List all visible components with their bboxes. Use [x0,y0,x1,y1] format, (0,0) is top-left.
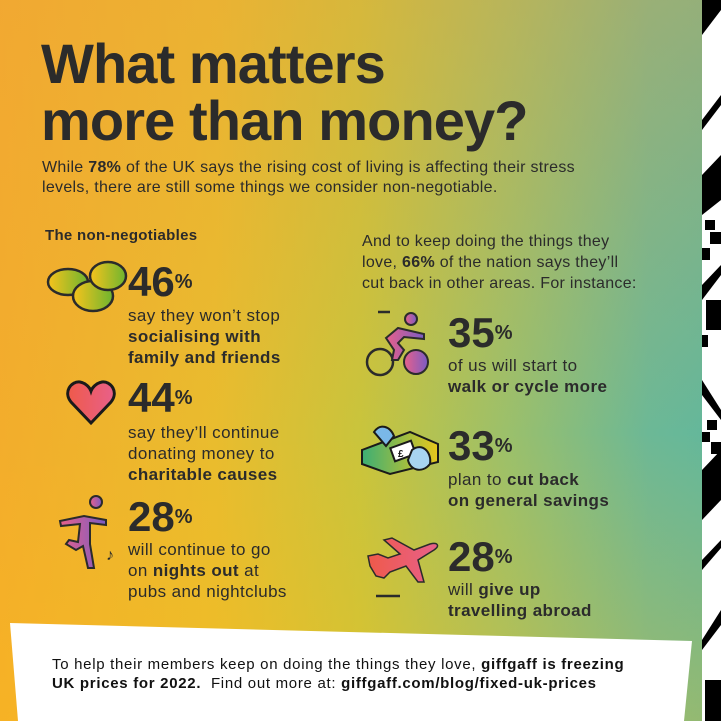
stat 46: family and friends [128,348,281,367]
stat 35: 35% [448,309,513,356]
heading: non-negotiables: The non-negotiables [45,227,197,244]
icon: dancer: ♪ [106,547,114,564]
icon: dancer [58,495,114,569]
subtitle: While 78% of the UK says the rising cost of living is affecting their stress [42,159,575,176]
stat 28 travel [448,533,592,620]
intro right: And to keep doing the things they [362,233,609,250]
stat 46: say they won’t stop [128,306,280,325]
stat 28 nights: on nights out at [128,561,259,580]
stat 44: charitable causes [128,465,278,484]
stat 44: say they’ll continue [128,423,280,442]
stat 28 travel: travelling abroad [448,601,592,620]
stat 33: plan to cut back [448,470,579,489]
icon: money: £ [398,449,404,460]
stat 33: 33% [448,422,513,469]
footer text [52,656,624,692]
icon: plane [367,537,438,598]
icon: speech bubbles [46,260,128,312]
stat 28 nights [128,493,287,601]
icon: heart [66,380,116,425]
stat 46: socialising with [128,327,261,346]
stat 44: 44% [128,374,193,421]
decorative strip [702,0,721,721]
stat 46 [128,258,281,367]
stat 28 nights: 28% [128,493,193,540]
stat 35: walk or cycle more [448,377,607,396]
stat 28 travel: 28% [448,533,513,580]
subtitle: levels, there are still some things we consider non-negotiable. [42,179,498,196]
title: more than money? [41,89,528,152]
stat 33 [448,422,609,510]
stat 44: donating money to [128,444,275,463]
title: What matters [41,32,385,95]
footer text: To help their members keep on doing the things they love, giffgaff is freezing [52,656,624,673]
stat 35: of us will start to [448,356,577,375]
stat 28 nights: will continue to go [128,540,271,559]
stat 28 nights: pubs and nightclubs [128,582,287,601]
intro right [362,233,637,292]
stat 35 [448,309,607,396]
footer panel [10,623,692,721]
subtitle [42,159,575,196]
intro right: love, 66% of the nation says they’ll [362,254,618,271]
stat 28 travel: will give up [448,580,541,599]
intro right: cut back in other areas. For instance: [362,275,637,292]
stat 33: on general savings [448,491,609,510]
stat 44 [128,374,280,484]
icon: cyclist [366,310,429,376]
stat 46: 46% [128,258,193,305]
footer text: UK prices for 2022. Find out more at: giffgaff.com/blog/fixed-uk-prices [52,675,597,692]
icon: money [361,426,439,475]
title [41,32,528,152]
